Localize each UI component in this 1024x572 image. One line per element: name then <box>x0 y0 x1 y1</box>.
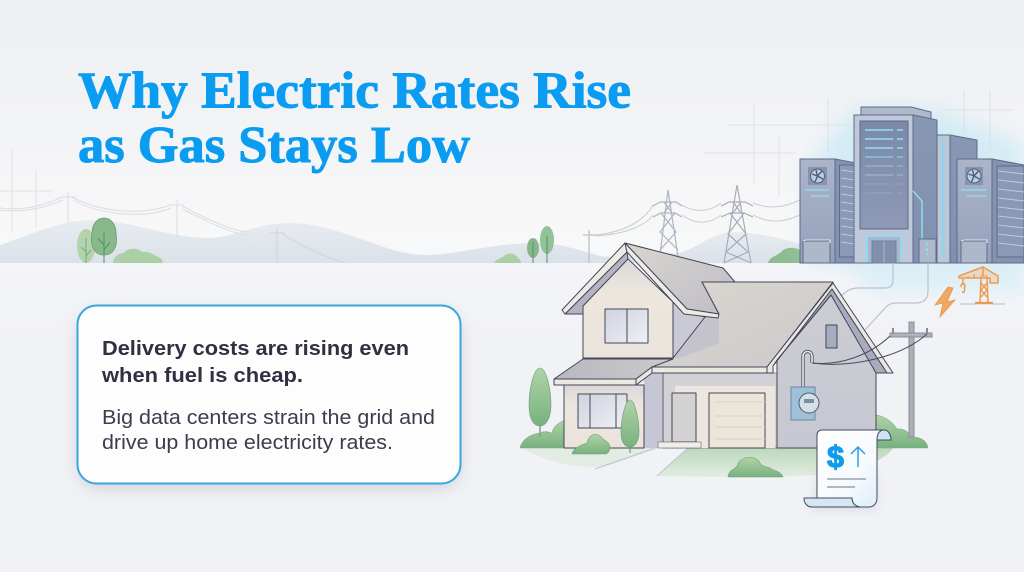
title: as Gas Stays Low <box>78 117 470 174</box>
pillar <box>644 373 663 448</box>
callout body text: Big data centers strain the grid and <box>102 407 435 429</box>
tree: front of porch <box>572 400 639 454</box>
title: Why Electric Rates Rise <box>78 62 631 120</box>
title <box>78 62 631 174</box>
data center glow <box>808 108 1024 292</box>
rear roof <box>625 243 735 314</box>
icon: lightning bolt <box>935 287 955 317</box>
callout body text <box>102 407 435 454</box>
dollar sign: $ <box>827 439 844 474</box>
icon: fan left <box>808 167 827 185</box>
house <box>554 243 893 448</box>
garage door <box>709 393 765 448</box>
lower window <box>578 394 627 428</box>
callout heading: when fuel is cheap. <box>101 364 303 387</box>
side gable wall <box>777 295 876 448</box>
yard and lawn <box>522 448 893 477</box>
card shadow <box>78 312 460 488</box>
lower wall <box>564 385 644 448</box>
building: left block <box>800 159 856 263</box>
callout heading: Delivery costs are rising even <box>102 337 409 360</box>
icon: rising bill <box>804 430 891 507</box>
building: rear block <box>937 135 977 263</box>
garage wall <box>663 373 777 448</box>
bill shadow <box>812 470 876 510</box>
panel: callout card <box>78 306 460 484</box>
upper window <box>605 309 648 343</box>
tree: left tall <box>529 368 551 437</box>
callout heading <box>101 337 409 387</box>
connector lines to house <box>836 263 928 330</box>
shrubs beside house <box>520 415 928 448</box>
vent <box>826 325 837 348</box>
callout body text: drive up home electricity rates. <box>102 432 393 454</box>
building: right block <box>957 159 1024 263</box>
main roof <box>652 282 833 367</box>
pylon: right <box>721 185 753 263</box>
pylon: left <box>653 190 682 263</box>
shrub on lawn <box>728 457 783 477</box>
data center complex <box>800 107 1024 263</box>
icon: crane <box>959 267 1005 304</box>
upper gable roof <box>562 243 719 318</box>
up arrow <box>851 447 865 467</box>
electric meter <box>791 352 819 420</box>
service pole and drop wires <box>812 322 932 437</box>
icon: fan right <box>965 167 983 185</box>
upper storey wall <box>583 258 673 358</box>
building: central tower <box>854 107 937 263</box>
porch roof <box>554 359 767 385</box>
side gable roof <box>767 283 893 373</box>
trees and shrubs on the horizon <box>77 218 800 263</box>
utility poles and wires <box>0 192 800 263</box>
door <box>658 393 701 448</box>
distant hills <box>0 220 805 263</box>
